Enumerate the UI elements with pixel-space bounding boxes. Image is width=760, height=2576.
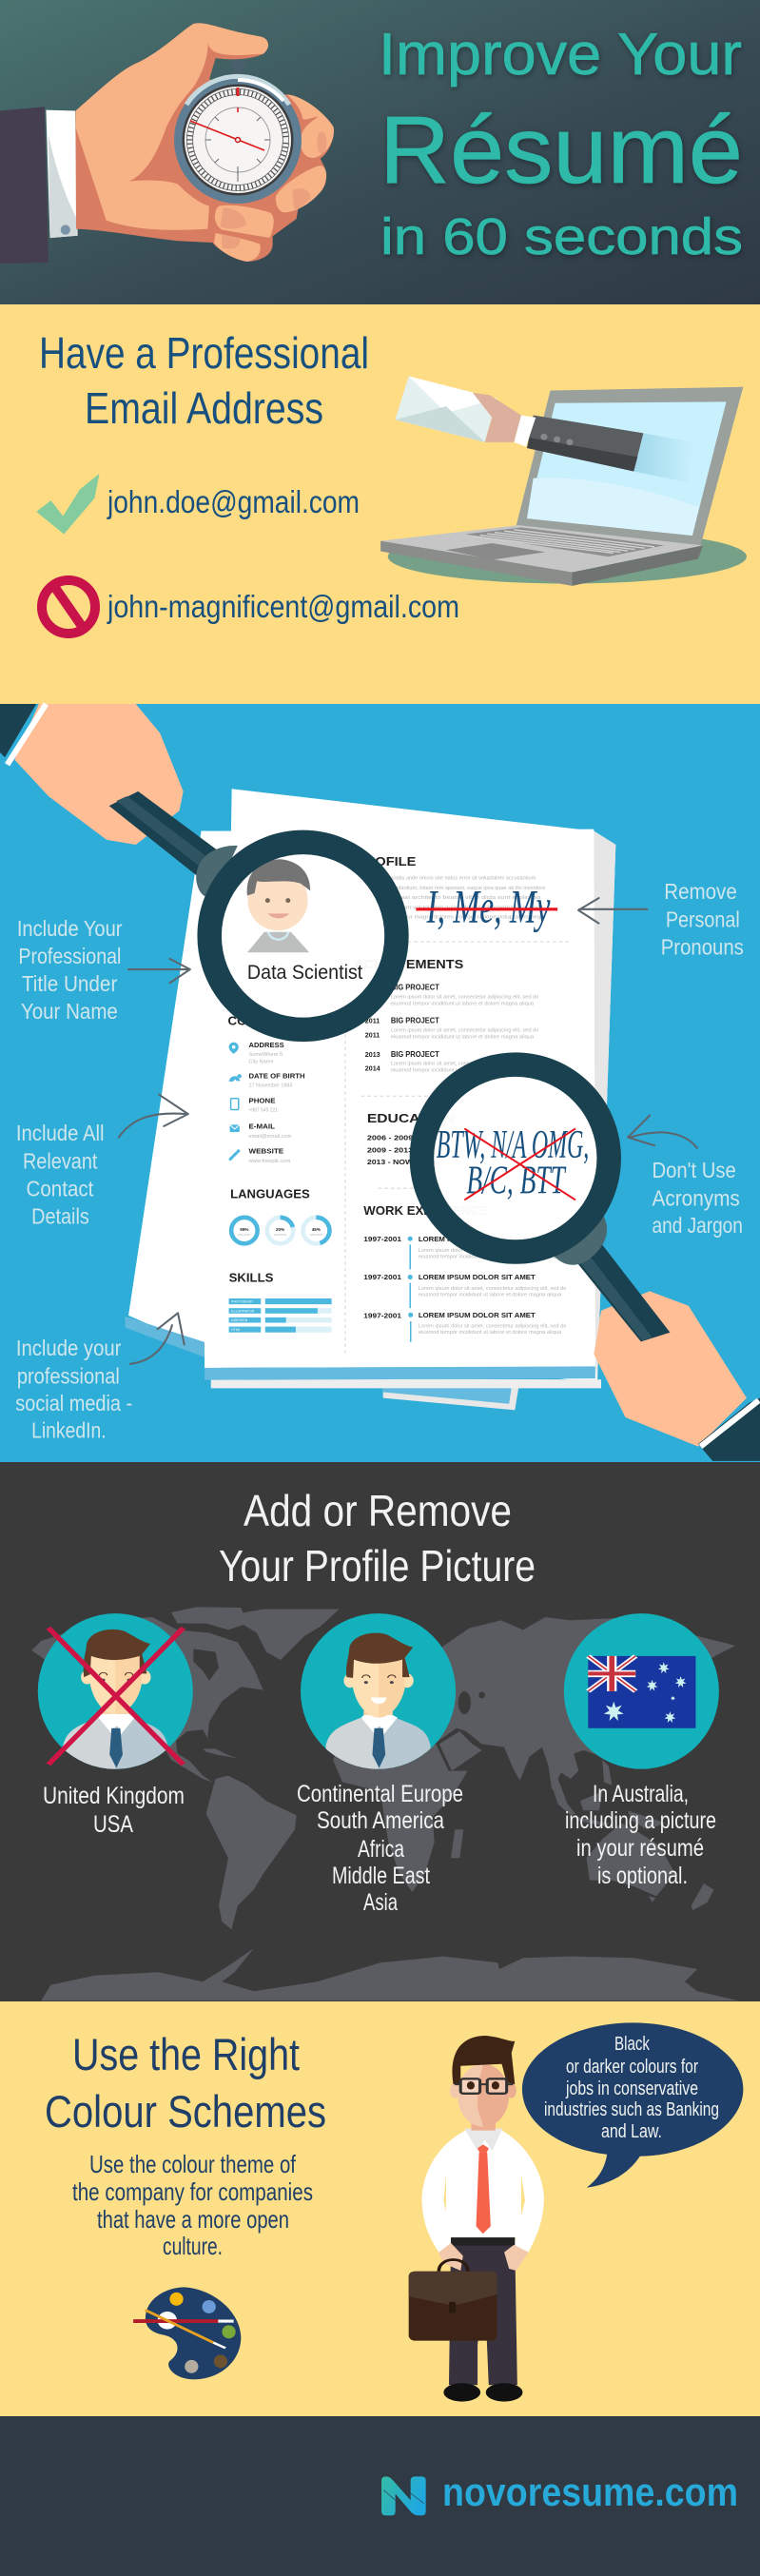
résumé contents: Nemo enim ipsam voluptatem quia voluptas sit aspernatur aut odit	[361, 905, 543, 910]
panel: résumé review	[0, 704, 760, 1462]
text: colour theme advice	[72, 2150, 313, 2260]
résumé contents: Lorem ipsum dolor sit amet, consectetur adipiscing elit, sed do	[391, 1027, 538, 1033]
résumé contents: 2009 - 2013	[367, 1145, 413, 1154]
text: UK and USA: United Kingdom	[43, 1783, 185, 1809]
text: colour theme advice: Use the colour theme of	[89, 2150, 297, 2178]
arrow: to skills	[130, 1313, 185, 1364]
callout: contact details: Contact	[27, 1176, 94, 1200]
icon: crossed-out portrait	[38, 1613, 193, 1772]
résumé contents: PHONE	[248, 1096, 276, 1104]
text: regions including picture: Continental Europe	[297, 1781, 463, 1807]
callout: social media: LinkedIn.	[31, 1417, 107, 1442]
panel: footer	[0, 2416, 760, 2576]
résumé contents: doloremque laudantium, totam rem aperiam, eaque ipsa quae ab illo inventore	[361, 886, 545, 891]
résumé contents: 1997-2001	[363, 1312, 401, 1319]
icon: paint palette	[133, 2287, 241, 2379]
résumé contents: 1997-2001	[363, 1236, 401, 1243]
icon: Australian flag	[564, 1613, 719, 1769]
callout: acronyms	[653, 1158, 743, 1238]
résumé contents: INDESIGN	[231, 1318, 248, 1322]
heading: email: Email Address	[85, 383, 323, 433]
text: UK and USA	[43, 1783, 185, 1838]
résumé contents: 20%	[276, 1227, 284, 1232]
heading: profile picture	[219, 1486, 536, 1590]
magnifier: acronyms and jargon: B/C, BTT	[466, 1159, 567, 1202]
arrow: to acronyms	[628, 1116, 697, 1148]
résumé contents: LOREM IPSUM DOLOR SIT AMET	[419, 1235, 536, 1243]
callout: personal pronouns	[661, 879, 744, 959]
icon: portrait	[301, 1613, 456, 1772]
résumé contents: BIG PROJECT	[391, 1017, 439, 1025]
résumé contents: +987 545 221	[248, 1108, 278, 1114]
résumé contents: 2011	[365, 1018, 380, 1025]
illustration: hand holding stopwatch	[0, 23, 334, 263]
résumé contents: E-MAIL	[248, 1122, 275, 1130]
résumé contents: WEBSITE	[248, 1146, 283, 1155]
résumé contents: 1997-2001	[363, 1274, 401, 1281]
résumé contents: www.freepik.com	[247, 1159, 291, 1164]
résumé contents: Lorem ipsum dolor sit amet, consectetur adipiscing elit, sed do	[419, 1286, 566, 1292]
résumé contents: eiusmod tempor incididunt ut labore et dolore magna aliqua	[391, 1001, 535, 1006]
text: colour theme advice: that have a more open	[97, 2205, 289, 2234]
text: Australia	[565, 1781, 716, 1889]
résumé contents: Lorem ipsum dolor sit amet, consectetur adipiscing elit, sed do	[419, 1324, 566, 1330]
speech bubble text: and Law.	[601, 2121, 662, 2142]
callout: social media: social media -	[15, 1391, 132, 1415]
résumé contents: 2011	[365, 1032, 380, 1040]
résumé contents: City Name	[248, 1060, 274, 1065]
callout: personal pronouns: Remove	[664, 879, 737, 904]
heading: email: Have a Professional	[39, 328, 369, 378]
text: Australia: is optional.	[597, 1863, 688, 1889]
résumé contents: BIG PROJECT	[391, 1050, 439, 1059]
magnifier: acronyms and jargon	[421, 1064, 760, 1461]
text: Australia: In Australia,	[593, 1781, 689, 1807]
résumé contents: ACHIEVEMENTS	[354, 957, 463, 971]
résumé contents: eiusmod tempor incididunt ut labore et dolore magna aliqua	[419, 1255, 562, 1260]
heading: colour schemes	[45, 2029, 326, 2137]
callout: professional title: Your Name	[21, 999, 118, 1024]
résumé contents: eiusmod tempor incididunt ut labore et dolore magna aliqua	[391, 1035, 535, 1041]
résumé contents: eiusmod tempor incididunt ut labore et dolore magna aliqua	[391, 1068, 535, 1074]
icon: prohibited sign	[42, 580, 95, 634]
résumé contents: 99%	[240, 1227, 248, 1232]
résumé contents: GERMAN	[274, 1233, 286, 1237]
magnifier: data scientist: Data Scientist	[247, 961, 362, 984]
callout: contact details: Relevant	[23, 1148, 98, 1173]
good email example: john.doe@gmail.com	[107, 484, 360, 519]
résumé contents: 17 November 1983	[248, 1083, 292, 1089]
heading: profile picture: Your Profile Picture	[219, 1541, 536, 1590]
text: regions including picture: Asia	[363, 1889, 398, 1916]
panel: profile picture	[0, 1462, 760, 2001]
world map	[31, 1607, 739, 2000]
résumé contents: Lorem ipsum dolor sit amet, consectetur adipiscing elit, sed do	[419, 1248, 566, 1254]
résumé contents	[228, 854, 575, 1355]
résumé contents: BIG PROJECT	[391, 984, 439, 992]
résumé contents: eiusmod tempor incididunt ut labore et dolore magna aliqua	[419, 1292, 562, 1298]
callout: acronyms: Acronyms	[653, 1186, 740, 1211]
résumé contents: LOREM IPSUM DOLOR SIT AMET	[419, 1273, 536, 1281]
illustration: businessman with briefcase	[409, 2036, 544, 2402]
heading: profile picture: Add or Remove	[244, 1486, 512, 1535]
callout: professional title: Title Under	[22, 971, 118, 996]
résumé contents: SPANISH	[310, 1233, 322, 1237]
callout: contact details	[16, 1121, 105, 1228]
résumé contents: veritatis et quasi architecto beatae vitae dicta sunt explicabo	[361, 895, 540, 901]
callout: professional title: Include Your	[17, 916, 123, 941]
résumé contents: 45%	[312, 1227, 321, 1232]
heading: colour schemes: Colour Schemes	[45, 2086, 326, 2137]
callout: professional title: Professional	[18, 944, 121, 968]
text: colour theme advice: the company for companies	[72, 2177, 313, 2206]
résumé contents: LANGUAGES	[230, 1186, 310, 1200]
callout: contact details: Include All	[16, 1121, 105, 1145]
title: Résumé	[380, 97, 743, 204]
speech bubble text: jobs in conservative	[565, 2078, 698, 2099]
callout: personal pronouns: Personal	[666, 907, 740, 932]
résumé contents: quia consequuntur magni dolores eos qui ratione voluptatem sequi	[361, 915, 545, 921]
text: regions including picture	[297, 1781, 463, 1916]
résumé contents: eiusmod tempor incididunt ut labore et dolore magna aliqua	[419, 1330, 562, 1336]
logo mark	[381, 2476, 426, 2515]
text: Australia: in your résumé	[576, 1835, 704, 1862]
icon: green check mark	[36, 474, 99, 535]
text: regions including picture: Middle East	[332, 1863, 430, 1889]
stopwatch needle	[190, 121, 264, 150]
résumé contents: CONTACT	[228, 1014, 288, 1028]
arrow: to contact details	[119, 1095, 188, 1138]
text: regions including picture: Africa	[358, 1836, 404, 1863]
résumé contents: SKILLS	[229, 1271, 273, 1285]
résumé contents: ILLUSTRATOR	[231, 1309, 255, 1313]
résumé contents: SomeWhere 5	[248, 1052, 283, 1058]
callout: acronyms: Don't Use	[653, 1158, 736, 1182]
résumé contents: PHOTOSHOP	[231, 1300, 253, 1304]
résumé contents: 2013 - NOW	[367, 1158, 414, 1166]
résumé contents: ENGLISH	[238, 1233, 251, 1237]
résumé contents: 2006 - 2009	[367, 1134, 413, 1142]
heading: colour schemes: Use the Right	[72, 2029, 300, 2079]
résumé contents: 2014	[365, 1065, 380, 1073]
speech bubble text: Black	[614, 2034, 651, 2055]
panel: professional email address	[0, 304, 760, 704]
résumé contents: PROFILE	[356, 854, 416, 868]
résumé contents: email@email.com	[248, 1134, 292, 1140]
bad email example: john-magnificent@gmail.com	[107, 589, 459, 624]
arrow: to pronouns	[578, 898, 647, 924]
text: UK and USA: USA	[93, 1811, 133, 1838]
arrow: to title	[128, 959, 190, 983]
résumé contents: EDUCATION	[367, 1111, 455, 1125]
callout: social media: Include your	[16, 1336, 122, 1360]
résumé contents: 2013	[365, 1051, 380, 1059]
illustration: laptop with hand and envelope	[380, 376, 747, 586]
résumé contents: DATE OF BIRTH	[248, 1071, 305, 1080]
text: colour theme advice: culture.	[163, 2232, 223, 2260]
résumé pages	[126, 789, 615, 1410]
title	[379, 22, 743, 265]
speech bubble	[522, 2022, 743, 2188]
panel: header	[0, 0, 760, 304]
callout: personal pronouns: Pronouns	[661, 934, 744, 959]
title: in 60 seconds	[380, 208, 743, 265]
callout: contact details: Details	[31, 1203, 89, 1228]
résumé contents: LOREM IPSUM DOLOR SIT AMET	[419, 1311, 536, 1319]
crossed-out pronouns: I, Me, My	[426, 880, 551, 933]
magnifier: data scientist	[0, 704, 397, 1029]
résumé contents: Sed ut perspiciatis unde omnis iste natus error sit voluptatem accusantium	[361, 876, 536, 882]
title: Improve Your	[379, 22, 742, 88]
callout: social media: professional	[17, 1363, 120, 1388]
magnifier: acronyms and jargon: BTW, N/A OMG,	[437, 1123, 589, 1167]
résumé contents: WORK EXPERIENCE	[363, 1203, 488, 1218]
text: regions including picture: South America	[317, 1807, 444, 1834]
callout: social media	[15, 1336, 132, 1442]
speech bubble text	[544, 2034, 719, 2142]
text: Australia: including a picture	[565, 1807, 716, 1834]
callout: professional title	[17, 916, 123, 1024]
heading: email	[39, 328, 369, 433]
résumé contents: HTML	[231, 1328, 241, 1332]
panel: colour schemes	[0, 2001, 760, 2416]
résumé contents: ADDRESS	[248, 1041, 284, 1049]
speech bubble text: or darker colours for	[566, 2057, 698, 2078]
résumé contents: Lorem ipsum dolor sit amet, consectetur adipiscing elit, sed do	[391, 995, 538, 1001]
résumé contents: Lorem ipsum dolor sit amet, consectetur adipiscing elit, sed do	[391, 1062, 538, 1067]
